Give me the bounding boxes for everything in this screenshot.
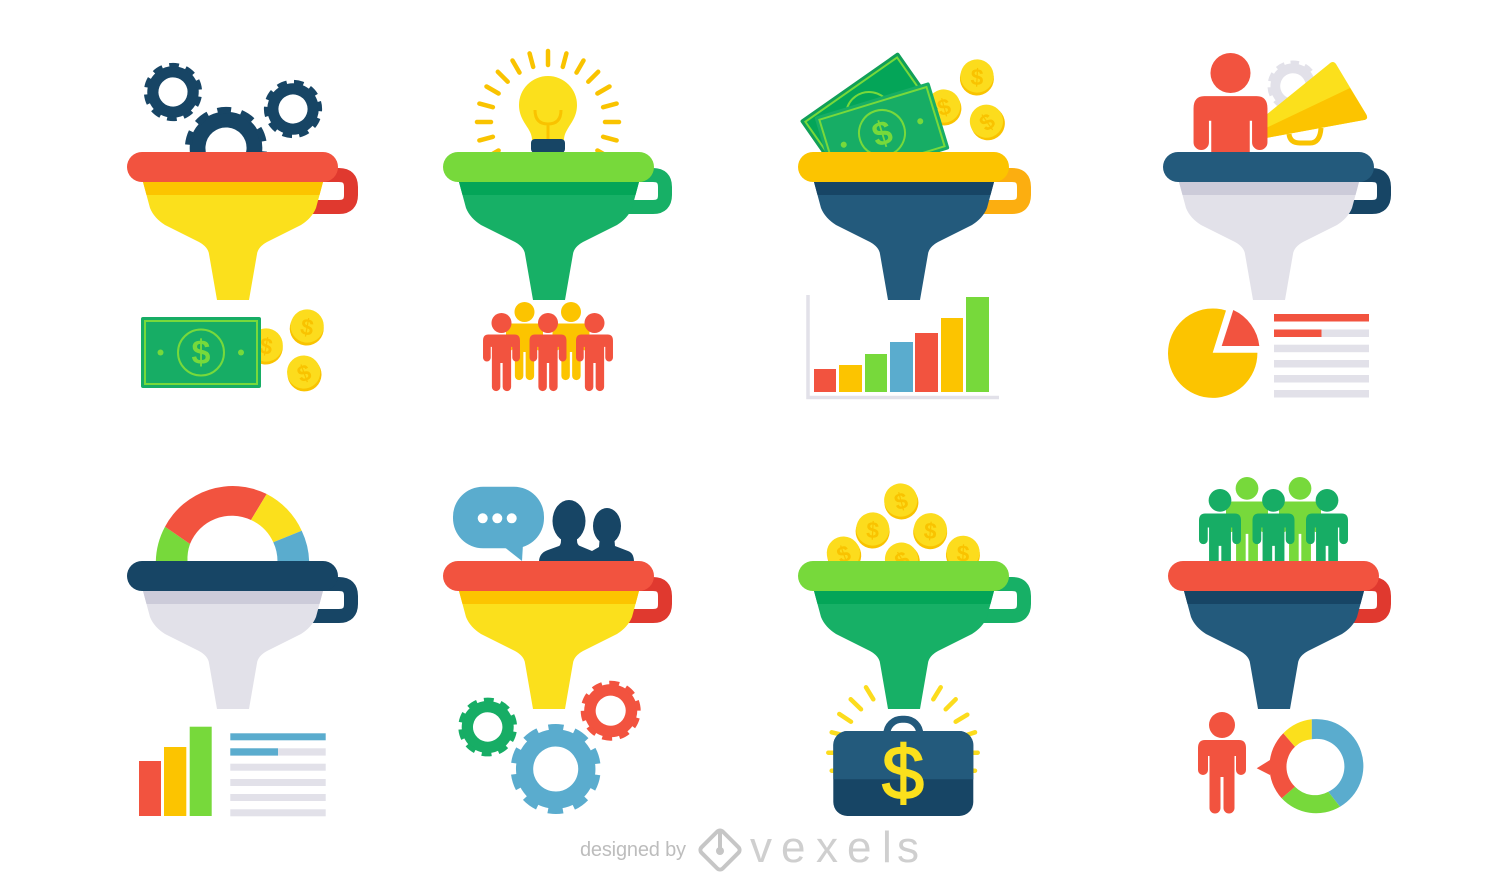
donut chart with pointer <box>1257 719 1363 813</box>
watermark: designed by vexels <box>580 823 919 872</box>
panel: crowd funnel to engagement <box>1168 477 1384 814</box>
funnel: green <box>443 152 665 300</box>
icon: pile of coins: $ <box>866 517 880 543</box>
icon: person <box>1194 53 1267 209</box>
funnel: navy and grey <box>127 561 351 709</box>
icon: coins: $ <box>298 313 316 341</box>
icon: coins: $ <box>294 359 315 387</box>
icon: pile of coins: $ <box>956 540 970 567</box>
funnel: red and yellow <box>443 561 665 709</box>
icon: coins: $ <box>974 108 1000 136</box>
icon: shine rays <box>828 687 978 771</box>
pie chart <box>1168 308 1259 398</box>
bar chart <box>139 727 212 816</box>
panel: cash funnel to bar chart <box>798 52 1024 397</box>
funnel: navy and grey <box>1163 152 1384 300</box>
bar chart <box>808 295 999 398</box>
funnel: red and navy <box>1168 561 1384 709</box>
icon: pile of coins: $ <box>833 540 854 568</box>
funnel: yellow and navy <box>798 152 1024 300</box>
funnel: red and yellow <box>127 152 351 300</box>
icon: stack of dollar bills <box>800 52 950 184</box>
icon: coins: $ <box>970 64 984 90</box>
text lines <box>230 733 326 816</box>
text lines <box>1274 314 1369 398</box>
icon: dollar bill <box>141 317 261 388</box>
icon: coins <box>246 307 327 396</box>
icon: pile of coins: $ <box>923 517 938 544</box>
icon: crowd of people <box>1199 477 1348 578</box>
panel: coins funnel to briefcase <box>798 480 1024 816</box>
icon: dollar bill: $ <box>192 334 211 372</box>
icon: gears <box>142 61 327 189</box>
icon: briefcase with dollar: $ <box>882 731 924 816</box>
panel: gears funnel to money <box>127 61 351 396</box>
icon: coins: $ <box>257 332 275 360</box>
icon: coins: $ <box>934 93 954 121</box>
icon: colored gears <box>456 677 644 816</box>
watermark: designed by vexels: designed by <box>580 839 686 861</box>
icon: pile of coins: $ <box>891 487 911 515</box>
icon: two silhouettes <box>539 500 634 562</box>
icon: pile of coins: $ <box>890 545 914 574</box>
icon: light bulb with rays <box>477 51 619 158</box>
icon: speech bubble <box>453 487 544 561</box>
icon: coins <box>923 59 1012 147</box>
icon: person <box>1198 712 1246 814</box>
funnel: green <box>798 561 1024 709</box>
panel: marketing funnel to pie report <box>1163 53 1384 398</box>
icon: colored arc gauge <box>156 486 309 562</box>
icon: stack of dollar bills: $ <box>868 113 897 155</box>
icon: team of people <box>483 302 613 391</box>
panel: gauge funnel to report <box>127 486 351 816</box>
icon: megaphone <box>1266 62 1367 143</box>
watermark: designed by vexels: vexels <box>750 823 919 872</box>
icon: gear behind megaphone <box>1265 58 1321 114</box>
icon: briefcase with dollar <box>833 719 973 816</box>
panel: idea funnel to people <box>443 51 665 391</box>
panel: conversation funnel to gears <box>443 487 665 816</box>
icon: pile of coins <box>822 480 981 585</box>
